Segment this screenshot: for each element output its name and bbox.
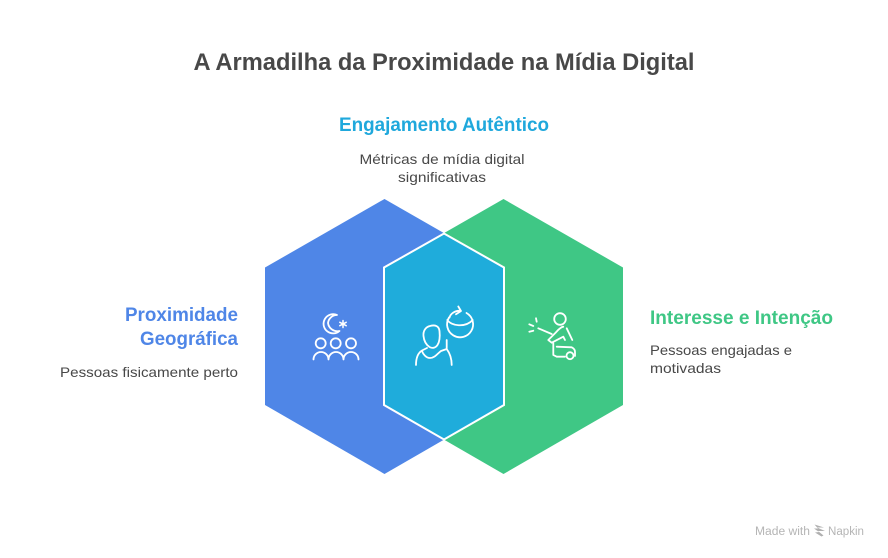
text: Proximidade description: Pessoas fisicamente perto [60,364,238,380]
title: A Armadilha da Proximidade na Mídia Digital [194,49,694,76]
heading: Proximidade Geográfica: Proximidade [125,305,238,326]
text: Engajamento description [360,151,524,185]
icon: moon, star and group of people [314,314,358,360]
text: Engajamento description: significativas [398,169,486,185]
heading: Proximidade Geográfica: Geográfica [140,329,238,350]
text: Engajamento description: Métricas de mídia digital [360,151,524,167]
text: Interesse description: motivadas [650,360,721,376]
heading: Interesse e Intenção: Interesse e Intenção [650,308,833,329]
text: Interesse description [650,342,792,376]
icon: person with rotating globe [416,306,473,365]
hexagon: Engajamento Autêntico overlap [384,234,504,440]
icon: Napkin logo [814,524,825,536]
heading: Engajamento Autêntico: Engajamento Autêntico [339,115,549,136]
text: Interesse description: Pessoas engajadas e [650,342,792,358]
watermark: Made with Napkin [755,524,864,538]
hexagon: Interesse e Intenção [384,199,623,474]
heading: Proximidade Geográfica [125,305,238,350]
hexagon: Proximidade Geográfica [265,199,504,474]
watermark: Made with Napkin: Napkin [828,526,864,538]
watermark: Made with Napkin: Made with [755,526,810,538]
icon: person gesturing with spark lines [529,313,575,359]
